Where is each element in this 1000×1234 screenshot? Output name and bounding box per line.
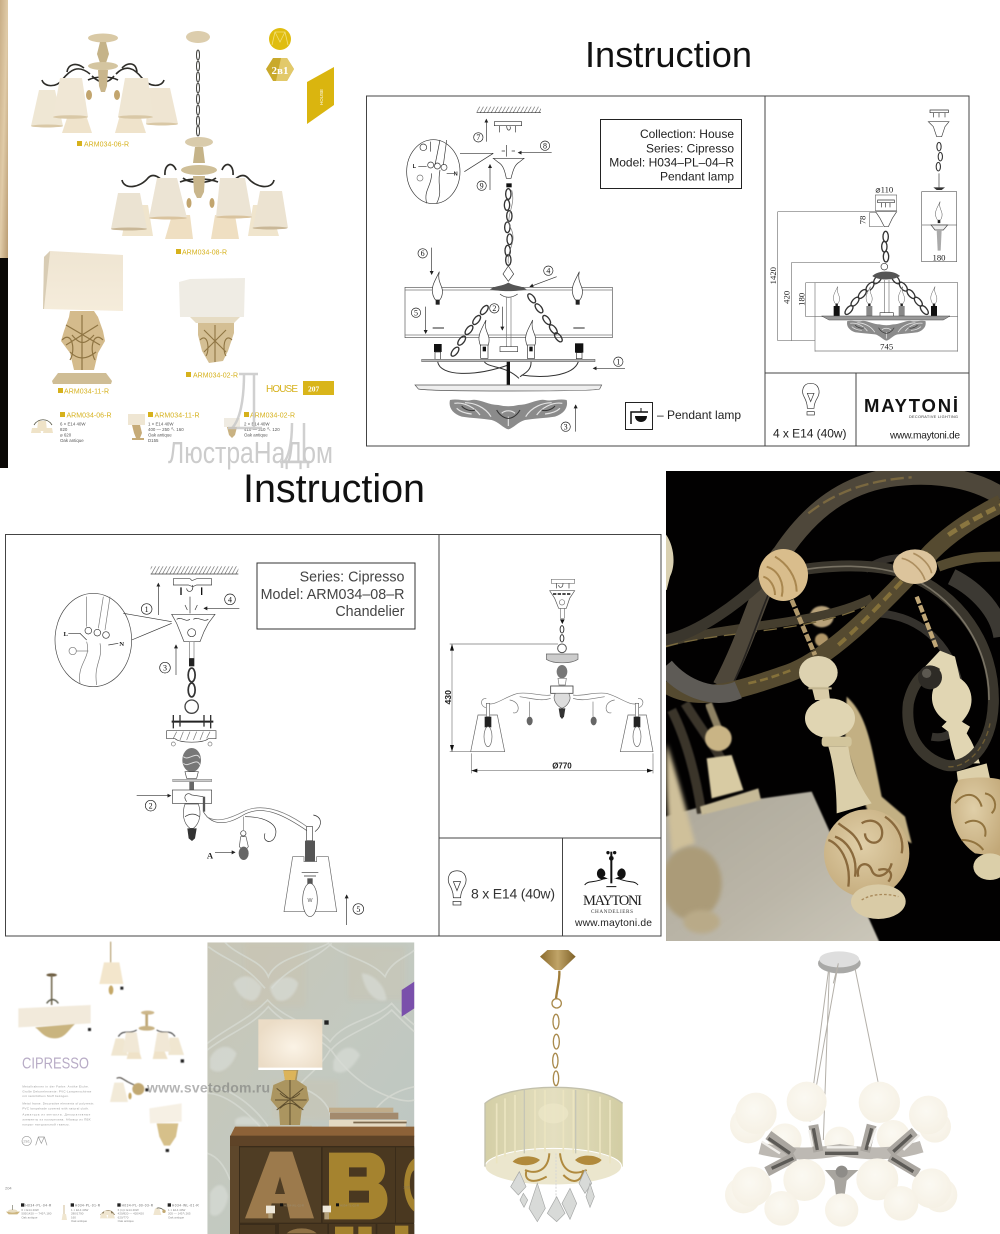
info box: chandelier model: Model: ARM034–08–R [261,587,404,603]
tab: purple section marker [402,982,414,1017]
title: Instruction (middle): Instruction [243,467,425,511]
spec list: ARM034-02-R: 2 × E14 40W [244,422,270,426]
spec list: H034 models: Oak antique [71,1219,87,1223]
dimension drawing: pendant lamp: 420 [782,291,792,304]
spec list: H034 models: H034-WL-01-R [172,1203,199,1207]
dimension drawing: pendant lamp: 180 [933,252,945,262]
assembly drawing: chandelier: A [207,850,214,860]
dimension drawing: chandelier: 430 [443,690,453,705]
assembly drawing: pendant lamp: 9 [480,181,484,190]
lamp shade outline [405,287,612,338]
panel: pendant lamp instruction [366,96,969,446]
panel: chandelier instruction [6,534,661,936]
assembly drawing: pendant lamp: 8 [543,141,547,150]
spec list: ARM034-11-R: D155 [148,438,159,443]
spec list: H034 models: H034-PL-01-R [75,1203,101,1207]
icon: M badge circle [269,28,291,50]
back globes [725,1107,957,1213]
spec list: H034 models: 1 × E14 40W [168,1208,186,1212]
lamp: small pendant [99,942,123,995]
assembly drawing: pendant lamp: 4 [546,266,550,275]
dimension drawing: pendant lamp: 1420 [768,267,778,284]
photo: table lamp on alphabet cabinet [207,942,414,1234]
logo: MAYTONI chandeliers: www.maytoni.de [574,918,652,929]
wall with damask pattern [207,942,414,1234]
spec list: H034 models: Oak antique [168,1215,184,1219]
logo: MAYTONI decorative lighting: MAYTONİ [864,395,958,416]
assembly drawing: pendant lamp: 1 [616,357,620,366]
spec list: H034 models: 160 [71,1215,76,1219]
label: ARM034-11-R: ARM034-11-R [64,388,109,396]
spec list: H034 models: 6 × E14 40W [21,1208,39,1212]
info box: pendant lamp model: Series: Cipresso [646,142,734,156]
lamp: rectangular shade chandelier [18,973,91,1038]
icon: 2 in 1 hexagon: 2в1 [272,65,288,77]
spec list: ARM034-06-R: ARM034-06-R [66,412,112,420]
lamp: eight-arm chandelier photo [111,31,288,239]
panel: catalog page HOUSE [31,28,334,470]
spec list: ARM034-11-R: 1 × E14 40W [148,422,174,426]
logo: MAYTONI decorative lighting: DECORATIVE LIGHTING [909,415,958,419]
text: 8 x E14 (40w): 8 x E14 (40w) [471,886,555,902]
dimension drawing: pendant lamp: 180 [796,293,806,306]
spec list: ARM034-06-R: 6 × E14 40W [60,422,86,426]
page label: HOUSE 207: HOUSE [266,384,298,395]
icon: bulb 8 x E14 [448,871,466,905]
detail callout: wiring: N [119,641,124,648]
info box: pendant lamp model: Model: H034–PL–04–R [609,156,734,170]
info box: pendant lamp model [600,120,742,188]
title: Instruction (top): Instruction [585,34,752,75]
spec list: ARM034-11-R: ARM034-11-R [154,412,200,420]
books [329,1108,407,1133]
front globes [732,1082,952,1227]
drum shade [485,1087,623,1185]
page label: HOUSE 207 [266,381,334,395]
watermark: Lustra Na Dom: ЛюстраНаДом [168,435,333,470]
assembly drawing: pendant lamp [405,107,625,432]
text block: product description: Metal frame. Decorative elements of polyresin. [22,1102,94,1106]
icon: pendant lamp legend: – Pendant lamp [657,408,741,422]
text block: product description: элементы из полирезина. Абажур из ПВХ [22,1117,91,1121]
detail callout: wiring: L [413,164,417,170]
assembly drawing: pendant lamp: 7 [476,133,480,142]
page label: HOUSE 207: 207 [308,384,320,394]
table lamp [258,1019,329,1133]
spec list: H034 models: 420/820 — 420/420 [118,1212,144,1216]
icons: 2 in 1 and M [22,1136,47,1146]
text block: product description: покрыт натуральной тканью. [22,1122,70,1126]
brand: CIPRESSO: CIPRESSO [22,1055,89,1072]
icon: bulb 4 x E14 [803,383,819,415]
dimension drawing: pendant lamp: 745 [880,341,893,351]
lamp: wall sconce [149,1103,182,1152]
cabinet with letters [230,1127,414,1234]
assembly drawing: chandelier: 2 [149,802,153,811]
cabinet with letters: 205 [403,1184,411,1189]
lamp: table lamp photo [43,251,123,384]
spec list: ARM034-02-R: Oak antique [244,432,268,438]
assembly drawing: pendant lamp: 6 [421,249,425,258]
left wooden pendant [799,656,909,919]
crystals [511,1170,594,1222]
assembly drawing: chandelier: W [307,898,313,904]
label: ARM034-08-R: ARM034-08-R [182,250,227,256]
chrome frame [760,1125,922,1200]
text block: product description: Арматура из металла. Декоративные [22,1113,91,1117]
photo: globe chandelier [725,951,957,1227]
spec list: ARM034-06-R: ⌀ 620 [60,432,72,438]
dimension drawing: chandelier [443,579,653,773]
cabinet with letters: H034-WL-02-R [284,1203,305,1207]
spec list: ARM034-02-R: 410 — 310 ↖ 120 [244,427,280,432]
spec list: ARM034-02-R [224,412,295,438]
spec list: H034 models: 205 — 145↖265 [168,1211,191,1216]
logo: MAYTONI chandeliers [574,851,652,929]
spec list: H034 models: 6 (1)× E14 40W [118,1208,139,1212]
spec list: ARM034-02-R: ARM034-02-R [250,412,295,420]
left edge strip: stone and black [0,0,8,468]
photo: chandelier arm and wooden pendant close-up [662,470,1000,943]
spec list: H034 models: 505/1420 — 745↖180 [21,1211,52,1216]
info box: pendant lamp model: Pendant lamp [660,170,734,184]
spec list: ARM034-06-R [31,412,112,443]
assembly drawing: chandelier: 1 [145,605,149,614]
page number 204: 204 [5,1185,12,1190]
info box: pendant lamp model: Collection: House [640,127,734,141]
info box: chandelier model: Chandelier [335,604,405,620]
dimension drawing: pendant lamp: ⌀110 [875,185,893,195]
icons: 2 in 1 and M: 2в1 [23,1139,31,1144]
logo: MAYTONI decorative lighting [864,395,960,442]
assembly drawing: chandelier: 5 [356,905,360,914]
tab: HOUSE section marker: HOUSE [319,89,324,105]
dimension drawing: chandelier: Ø770 [552,762,572,771]
lamp: five-arm chandelier photo [31,34,178,133]
spec list: H034 models: H034-PL-04-R [25,1203,52,1207]
assembly drawing: chandelier [55,566,364,925]
logo: MAYTONI chandeliers: CHANDELIERS [591,909,633,915]
spec list: ARM034-11-R: 400 — 250 ↖ 160 [148,427,184,432]
spec list: H034 models: Oak antique [21,1215,38,1219]
icon: 2 in 1 hexagon [266,58,294,81]
dimension drawing: pendant lamp: 78 [858,216,868,224]
text block: product description: Metallrahmen in der Farbe: Antike Eiche. [22,1085,89,1089]
spec list: H034 models: 1 × E14 40W [71,1208,89,1212]
text block: product description: PVC lampshade covered with natural cloth. [22,1106,89,1110]
spec list: H034 models: H034-PL-00-03-R [122,1203,154,1207]
text block: product description: mit natürlichem Stoff bezogen. [22,1094,69,1098]
watermark: www.svetodom.ru: www.svetodom.ru [146,1080,270,1096]
curled round arm [665,566,993,767]
icon: pendant lamp legend [626,402,741,430]
logo: MAYTONI chandeliers: MAYTONI [583,893,642,909]
watermark: Lustra Na Dom [168,374,333,470]
text: 4 x E14 (40w): 4 x E14 (40w) [773,426,846,440]
text block: product description: Große Dekorelemente: PVC-Lampenschirme [22,1089,92,1093]
tab: HOUSE section marker [307,67,334,124]
right wooden pendant carved ball [951,763,1000,880]
assembly drawing: chandelier: 4 [228,595,232,604]
lamp: wall lamp photo [179,278,245,363]
spec list: ARM034-11-R [128,412,200,443]
info box: chandelier model [257,563,415,629]
assembly drawing: chandelier: 3 [163,664,167,673]
cabinet with letters: H034-TL-02-R [340,1203,360,1207]
spec list: H034 models: 620/770 [118,1215,129,1219]
assembly drawing: pendant lamp: 3 [564,422,568,431]
detail callout: wiring: N [454,171,458,177]
panel: catalog page CIPRESSO [5,942,199,1223]
text block: product description [22,1085,94,1126]
detail callout: wiring [407,140,493,204]
spec list: ARM034-11-R: Oak antique [148,432,172,438]
spec list: H034 models: Oak antique [118,1219,134,1223]
logo: MAYTONI decorative lighting: www.maytoni.de [889,430,960,442]
right wooden pendant top [925,651,980,763]
brass arms [513,1153,602,1213]
info box: chandelier model: Series: Cipresso [300,570,405,586]
detail callout: wiring: L [63,631,68,638]
assembly drawing: pendant lamp: 2 [492,304,496,313]
spec list: ARM034-06-R: Oak antique [60,438,84,443]
spec list: ARM034-06-R: 820 [60,427,68,432]
detail callout: wiring [55,593,172,687]
assembly drawing: pendant lamp: 5 [414,308,418,317]
spec list: H034 models [6,1203,199,1223]
photo: pendant lamp with drum shade and crystals [485,950,623,1222]
label: ARM034-02-R: ARM034-02-R [193,372,238,380]
lamp: wall lamp with arm [110,1078,148,1102]
spec list: H034 models: 280/1790 [71,1212,84,1216]
label: ARM034-06-R: ARM034-06-R [84,142,129,148]
lamp: five-arm chandelier [111,1011,184,1063]
dimension drawing: pendant lamp [768,110,958,352]
